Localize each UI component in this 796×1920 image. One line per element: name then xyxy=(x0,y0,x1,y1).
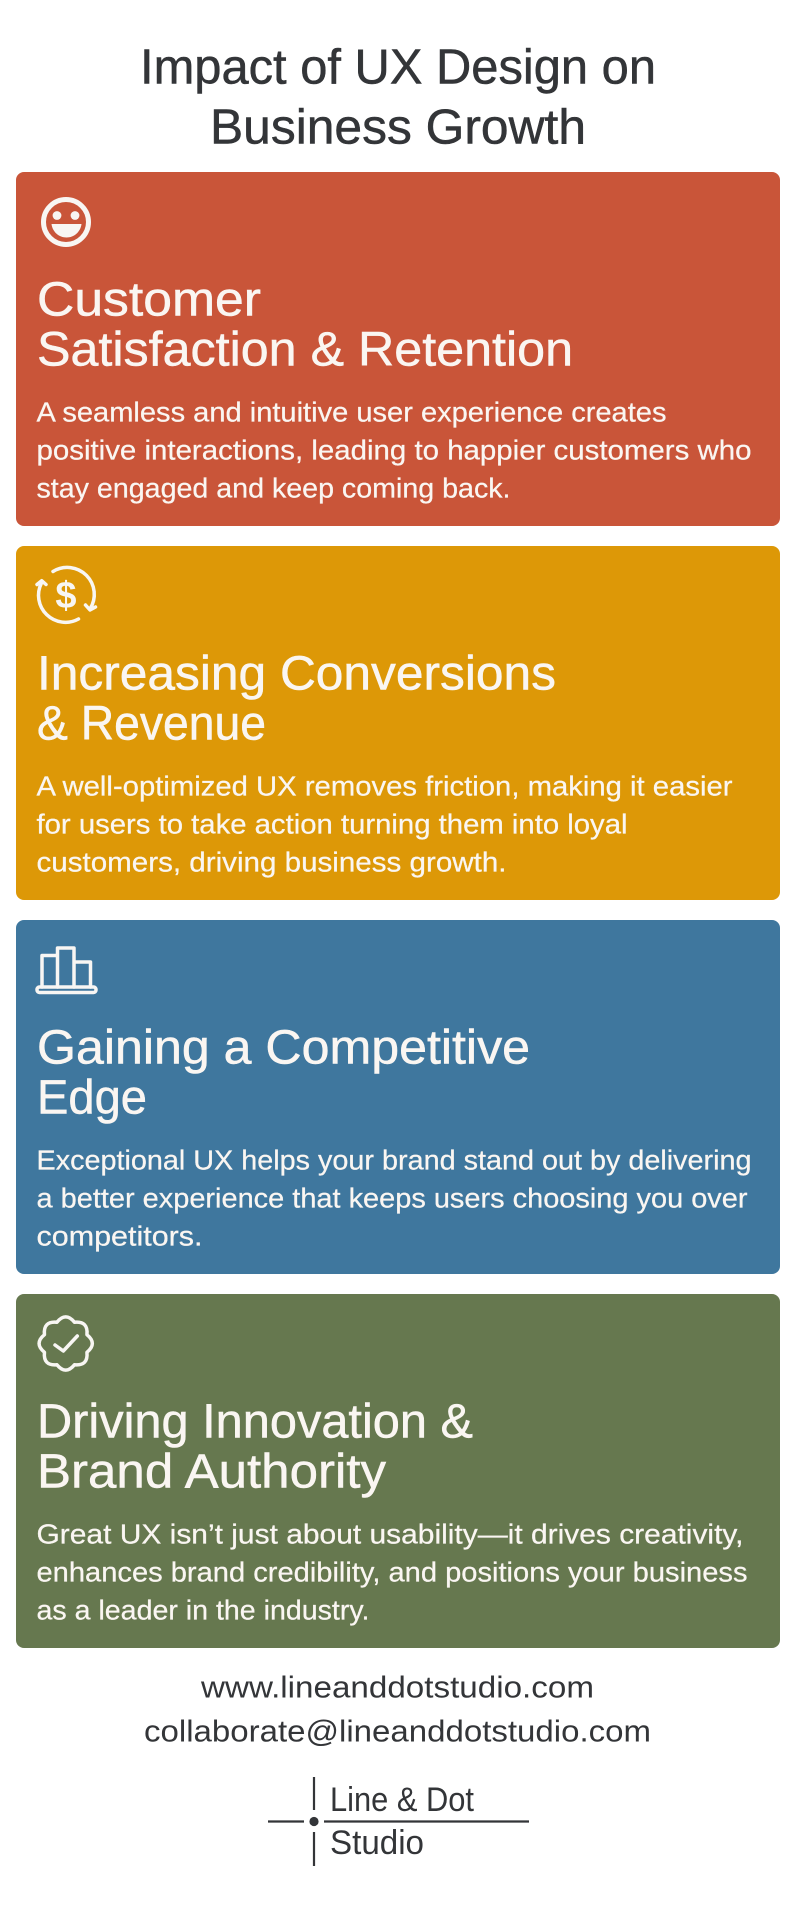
heading: customer satisfaction xyxy=(37,274,573,376)
icon: bar chart xyxy=(37,948,96,992)
body text: competitive edge: competitors. xyxy=(36,1220,202,1252)
logo: line and dot studio: Line & Dot xyxy=(330,1781,474,1819)
body text: increasing conversions xyxy=(36,770,733,878)
body text: increasing conversions: A well-optimized UX removes friction, making it easier xyxy=(36,770,733,802)
contact details xyxy=(144,1670,651,1748)
contact details: collaborate@lineanddotstudio.com xyxy=(144,1714,651,1748)
body text: innovation and authority xyxy=(36,1518,748,1626)
logo: line and dot studio: Studio xyxy=(330,1824,424,1862)
heading: increasing conversions: Increasing Conversions xyxy=(37,648,556,700)
heading: competitive edge: Edge xyxy=(37,1072,147,1124)
body text: customer satisfaction: positive interactions, leading to happier customers who xyxy=(36,434,752,466)
icon: circular arrows with dollar xyxy=(37,567,96,622)
icon: circular arrows with dollar: $ xyxy=(55,575,77,617)
icon: smiling face xyxy=(44,200,88,244)
icon: verified badge xyxy=(39,1317,92,1370)
title: Impact of UX Design on xyxy=(140,40,656,94)
title xyxy=(140,40,656,154)
body text: innovation and authority: enhances brand credibility, and positions your business xyxy=(36,1556,748,1588)
body text: increasing conversions: for users to take action turning them into loyal xyxy=(36,808,628,840)
panel: innovation and authority xyxy=(16,1294,780,1648)
heading: innovation and authority: Driving Innovation & xyxy=(37,1396,473,1448)
heading: customer satisfaction: Customer xyxy=(37,274,261,326)
body text: customer satisfaction: A seamless and intuitive user experience creates xyxy=(36,396,666,428)
body text: competitive edge: Exceptional UX helps your brand stand out by delivering xyxy=(36,1144,752,1176)
body text: innovation and authority: as a leader in the industry. xyxy=(36,1594,370,1626)
heading: innovation and authority xyxy=(37,1396,473,1498)
panel: customer satisfaction xyxy=(16,172,780,526)
title: Business Growth xyxy=(210,100,586,154)
heading: competitive edge: Gaining a Competitive xyxy=(37,1022,530,1074)
body text: customer satisfaction xyxy=(36,396,752,504)
body text: increasing conversions: customers, driving business growth. xyxy=(36,846,506,878)
panel: increasing conversions xyxy=(16,546,780,900)
heading: competitive edge xyxy=(37,1022,530,1124)
logo: line and dot studio xyxy=(268,1777,529,1866)
panel: competitive edge xyxy=(16,920,780,1274)
body text: innovation and authority: Great UX isn’t just about usability—it drives creativity, xyxy=(36,1518,743,1550)
contact details: www.lineanddotstudio.com xyxy=(200,1670,594,1704)
heading: increasing conversions: & Revenue xyxy=(37,698,266,750)
heading: increasing conversions xyxy=(37,648,556,750)
body text: competitive edge xyxy=(36,1144,752,1252)
heading: customer satisfaction: Satisfaction & Retention xyxy=(37,324,573,376)
body text: competitive edge: a better experience that keeps users choosing you over xyxy=(36,1182,748,1214)
heading: innovation and authority: Brand Authority xyxy=(37,1446,386,1498)
body text: customer satisfaction: stay engaged and keep coming back. xyxy=(36,472,510,504)
